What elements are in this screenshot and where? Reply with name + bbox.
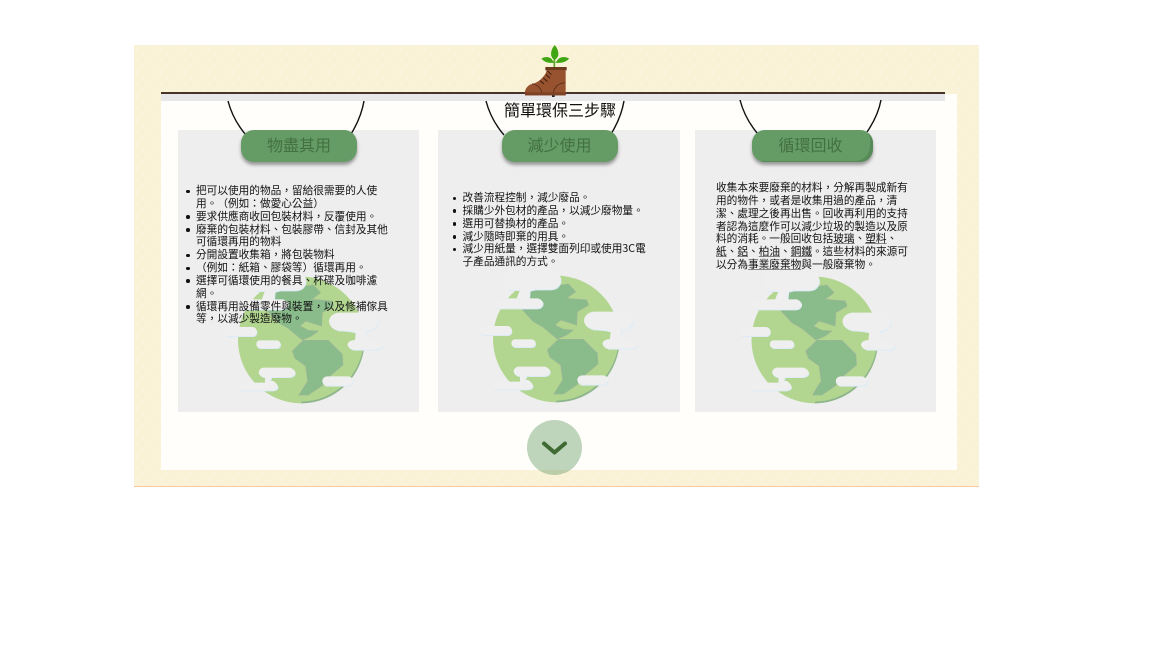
text block: 減少使用 list: 改善流程控制，減少廢品。 xyxy=(462,192,590,204)
button: 物盡其用: 物盡其用 xyxy=(267,138,331,155)
panel: 物盡其用 background xyxy=(178,130,419,412)
icon: boot with plant xyxy=(524,45,570,97)
icon: scroll down chevron button xyxy=(527,420,582,475)
globe: panel 1 xyxy=(225,272,383,403)
text block: 減少使用 list: 子產品通訊的方式。 xyxy=(462,256,558,268)
text block: 循環回收 paragraph: 紙、鋁、柏油、鋼鐵。這些材料的來源可 xyxy=(716,246,908,258)
button: 減少使用: 減少使用 xyxy=(527,138,592,154)
text block: 物盡其用 list: 循環再用設備零件與裝置，以及修補傢具 xyxy=(196,301,388,313)
text block: 循環回收 paragraph: 以分為事業廢棄物與一般廢棄物。 xyxy=(716,259,876,271)
text block: 物盡其用 list: 要求供應商收回包裝材料，反覆使用。 xyxy=(196,211,377,223)
globe: panel 2 xyxy=(480,271,638,402)
globe: panel 3 xyxy=(738,272,896,403)
text block: 物盡其用 list: 網。 xyxy=(196,288,217,300)
text block: 物盡其用 list: 可循環再用的物料 xyxy=(196,236,281,248)
text block: 減少使用 list: 減少用紙量，選擇雙面列印或使用3C電 xyxy=(462,241,646,256)
text block: 循環回收 paragraph xyxy=(716,182,908,271)
shelf line xyxy=(161,92,945,101)
text block: 物盡其用 list xyxy=(186,184,388,325)
white content card xyxy=(161,94,957,470)
text block: 物盡其用 list: 用。（例如：做愛心公益） xyxy=(196,198,324,210)
text block: 減少使用 list: 減少隨時即棄的用具。 xyxy=(462,231,569,243)
text block: 減少使用 list: 採購少外包材的產品，以減少廢物量。 xyxy=(462,205,644,217)
text block: 循環回收 paragraph: 料的消耗。一般回收包括玻璃、塑料、 xyxy=(716,233,897,245)
text block: 物盡其用 list: 把可以使用的物品，留給很需要的人使 xyxy=(196,185,377,197)
button: 循環回收: 循環回收 xyxy=(778,138,842,155)
text block: 物盡其用 list: 選擇可循環使用的餐具、杯碟及咖啡濾 xyxy=(196,275,377,287)
patterned cream background frame xyxy=(134,45,979,487)
panel: 減少使用 background xyxy=(438,130,680,412)
text block: 循環回收 paragraph: 者認為這麼作可以減少垃圾的製造以及原 xyxy=(716,221,908,233)
text block: 物盡其用 list: 廢棄的包裝材料、包裝膠帶、信封及其他 xyxy=(196,224,388,236)
text block: 減少使用 list xyxy=(453,192,646,268)
text block: 循環回收 paragraph: 潔、處理之後再出售。回收再利用的支持 xyxy=(716,208,908,220)
button: 物盡其用 xyxy=(241,130,357,162)
text block: 物盡其用 list: 等，以減少製造廢物。 xyxy=(196,313,303,325)
text block: 循環回收 paragraph: 用的物件，或者是收集用過的產品，清 xyxy=(716,195,897,207)
text block: 物盡其用 list: （例如：紙箱、膠袋等）循環再用。 xyxy=(196,262,367,274)
button: 循環回收 xyxy=(752,130,873,162)
text block: 循環回收 paragraph: 收集本來要廢棄的材料，分解再製成新有 xyxy=(716,182,908,194)
button: 減少使用 xyxy=(502,130,618,162)
panel: 循環回收 background xyxy=(695,130,936,412)
text block: 減少使用 list: 選用可替換材的產品。 xyxy=(462,218,569,230)
text block: 物盡其用 list: 分開設置收集箱，將包裝物料 xyxy=(196,249,335,261)
title: 簡單環保三步驟 xyxy=(504,102,616,120)
